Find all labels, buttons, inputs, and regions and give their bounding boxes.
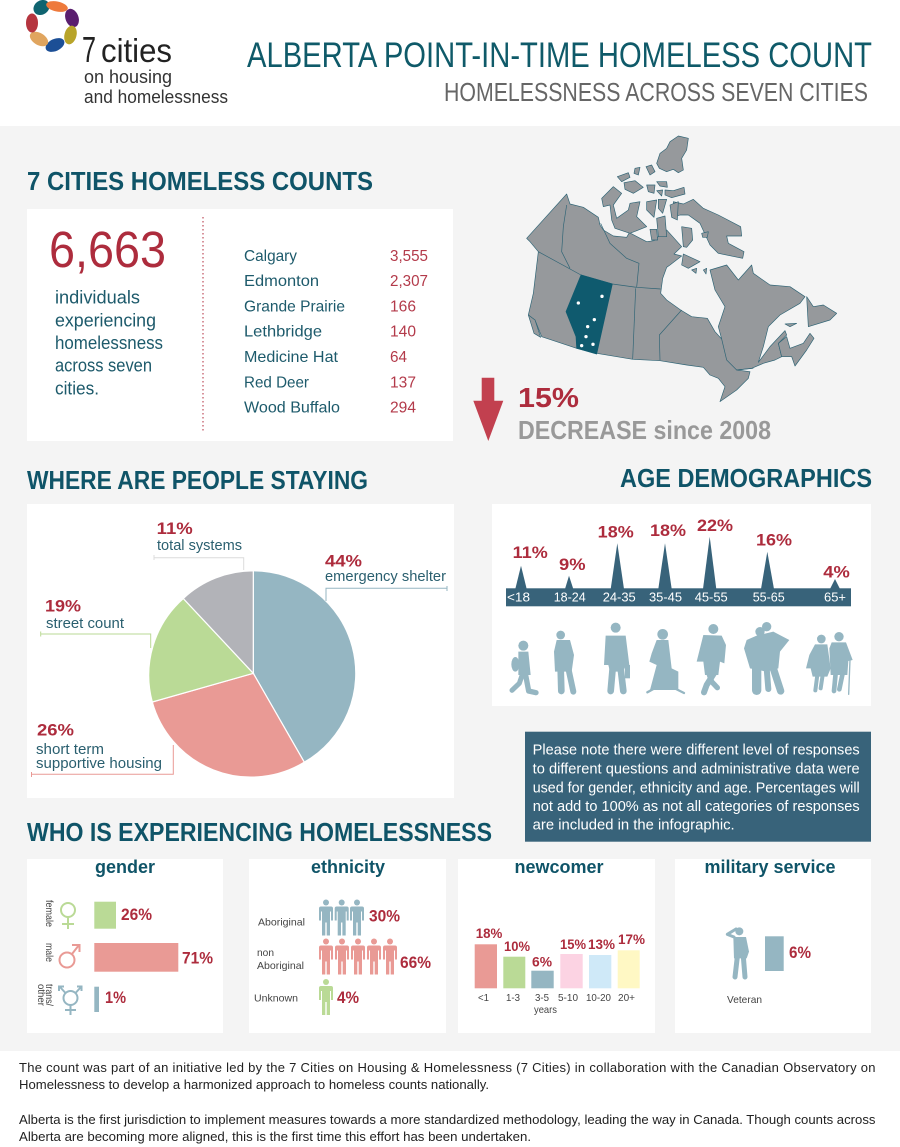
age axis with spikes: [506, 537, 851, 606]
age percentages: 18%: [598, 523, 634, 542]
city list: Edmonton: [244, 273, 319, 290]
figure: man with briefcase: [604, 623, 630, 691]
label: short term supportive housing: short term: [36, 741, 104, 758]
newcomer bar chart: <1: [478, 992, 489, 1004]
label: emergency shelter: 44%: [325, 552, 362, 571]
newcomer bar chart: 15%: [560, 936, 587, 952]
ethnicity row: Unknown: Unknown: [254, 993, 298, 1005]
people silhouettes by age: [511, 622, 853, 694]
newcomer bar chart: 17%: [618, 931, 646, 947]
city list: [244, 248, 428, 417]
panel: newcomer: newcomer: [514, 857, 604, 877]
ethnicity row: Unknown: [254, 979, 359, 1015]
newcomer bar chart: 13%: [588, 936, 616, 952]
gender row: trans/other: other: [35, 984, 47, 1006]
panel: where people stay: [27, 504, 454, 798]
newcomer bar chart: 3-5: [535, 992, 549, 1004]
age axis labels: 24-35: [603, 590, 636, 605]
label: short term supportive housing: 26%: [37, 721, 74, 740]
age axis labels: 45-55: [695, 590, 728, 605]
figure: couple: [744, 622, 789, 691]
panel: gender: gender: [95, 857, 155, 877]
label: street count: street count: [46, 615, 125, 632]
panel: newcomer: [458, 857, 655, 1033]
newcomer bar chart: [475, 925, 646, 1016]
age axis labels: <18: [507, 590, 530, 605]
footer text: Homelessness to develop a harmonized approach to homeless counts nationally.: [19, 1077, 489, 1092]
figure: child: [511, 641, 536, 693]
footer text: [0, 1051, 900, 1147]
panel: age demographics: [492, 504, 871, 706]
figure: woman in coat: [647, 629, 684, 693]
panel: ethnicity: [249, 857, 446, 1033]
ethnicity row: Unknown: 4%: [337, 988, 359, 1007]
label: total systems: total systems: [157, 537, 242, 554]
city list: Calgary: [244, 248, 297, 265]
age axis labels: 18-24: [554, 590, 586, 605]
ethnicity row: non Aboriginal: non: [257, 947, 274, 959]
total description: experiencing: [55, 310, 156, 330]
city list: Grande Prairie: [244, 298, 345, 315]
age percentages: 11%: [513, 543, 548, 562]
age percentages: [513, 516, 850, 582]
footer text: The count was part of an initiative led by the 7 Cities on Housing & Homelessness (7 Cities) in collaboration with the Canadian Observatory on: [19, 1060, 875, 1075]
figure: youth: [554, 631, 574, 692]
veteran label: Veteran: [727, 994, 762, 1006]
newcomer bar chart: 20+: [618, 992, 635, 1004]
newcomer bar chart: 1-3: [506, 992, 520, 1004]
decrease label: DECREASE since 2008: [518, 415, 771, 445]
gender row: male: 71%: [182, 949, 213, 968]
arrow: decrease: [473, 378, 503, 441]
label: emergency shelter: [325, 552, 447, 601]
map of Canada with Alberta highlighted: [527, 136, 837, 402]
label: short term supportive housing: [32, 721, 173, 777]
newcomer bar chart: 10%: [504, 938, 531, 954]
city list: 2,307: [390, 273, 428, 290]
callout: note: are included in the infographic.: [533, 817, 735, 833]
veteran percentage: 6%: [789, 943, 811, 962]
heading: age demographics: AGE DEMOGRAPHICS: [620, 463, 872, 493]
city list: 64: [390, 349, 407, 366]
newcomer bar chart: 6%: [532, 954, 553, 970]
heading: who is experiencing homelessness: WHO IS EXPERIENCING HOMELESSNESS: [27, 817, 492, 847]
age percentages: 18%: [650, 521, 686, 540]
label: street count: [41, 597, 151, 648]
gender row: female: [43, 900, 152, 929]
callout: note: used for gender, ethnicity and age. Percentages will: [533, 780, 860, 796]
gender row: trans/other: [35, 984, 126, 1015]
total description: across seven: [55, 356, 152, 376]
age axis labels: [507, 590, 846, 605]
label: street count: 19%: [45, 597, 81, 616]
age axis labels: 65+: [824, 590, 846, 605]
total description: cities.: [55, 378, 99, 398]
city list: 137: [390, 374, 416, 391]
city list: Medicine Hat: [244, 349, 339, 366]
logo: 7 cities: [26, 0, 228, 107]
gender row: trans/other: trans/: [43, 984, 55, 1006]
footer text: Alberta is the first jurisdiction to implement measures towards a more standardized methodology, leading the way in Canada. Though counts across: [19, 1112, 876, 1127]
decrease percentage: 15%: [518, 382, 579, 413]
ethnicity row: Aboriginal: Aboriginal: [258, 917, 305, 929]
newcomer bar chart: years: [534, 1004, 557, 1016]
logo: 7 cities: and homelessness: [84, 87, 228, 107]
logo: 7 cities: 7: [82, 29, 96, 70]
gender row: trans/other: 1%: [105, 988, 126, 1007]
city list: 166: [390, 298, 416, 315]
city list: 140: [390, 324, 416, 341]
total description: [55, 288, 163, 398]
icon: saluting soldier: [727, 927, 749, 977]
Alberta: [566, 275, 612, 354]
pie chart: [149, 571, 356, 777]
age axis labels: 55-65: [753, 590, 785, 605]
city list: 3,555: [390, 248, 428, 265]
label: total systems: 11%: [157, 519, 193, 538]
footer text: Alberta are becoming more aligned, this is the first time this effort has been undertaken.: [19, 1129, 531, 1144]
ethnicity row: non Aboriginal: Aboriginal: [257, 960, 304, 972]
callout: note: not add to 100% as not all categories of responses: [533, 799, 860, 815]
total count: 6,663: [49, 221, 166, 278]
newcomer bar chart: 18%: [476, 925, 503, 941]
age percentages: 22%: [697, 516, 733, 535]
gender row: male: [43, 943, 213, 972]
panel: military service: military service: [704, 857, 836, 877]
age percentages: 9%: [559, 555, 586, 574]
label: short term supportive housing: supportive housing: [36, 755, 162, 772]
city dots: [577, 295, 604, 347]
total description: homelessness: [55, 333, 163, 353]
callout: note: to different questions and administrative data were: [533, 761, 860, 777]
logo: 7 cities: on housing: [84, 67, 172, 87]
newcomer bar chart: 5-10: [558, 992, 578, 1004]
city list: Red Deer: [244, 374, 310, 391]
logo: 7 cities: cities: [101, 32, 172, 69]
figure: elderly pair: [806, 632, 853, 694]
ethnicity row: Aboriginal: [258, 900, 400, 936]
veteran bar: [765, 936, 784, 971]
callout: note: [525, 732, 871, 842]
city list: 294: [390, 400, 416, 417]
ethnicity row: non Aboriginal: [257, 938, 431, 974]
gender row: female: 26%: [121, 905, 152, 924]
figure: walking man: [697, 624, 726, 692]
callout: note: Please note there were different level of responses: [533, 742, 860, 758]
header band: [0, 0, 900, 126]
city list: Wood Buffalo: [244, 400, 340, 417]
ethnicity row: Aboriginal: 30%: [369, 907, 400, 926]
panel: gender: [27, 857, 223, 1033]
ethnicity row: non Aboriginal: 66%: [400, 953, 431, 972]
label: total systems: [154, 519, 244, 570]
label: emergency shelter: emergency shelter: [325, 568, 446, 585]
panel: military service: [675, 857, 871, 1033]
gender row: male: male: [43, 943, 55, 962]
total description: individuals: [55, 288, 140, 308]
city list: Lethbridge: [244, 324, 322, 341]
age axis labels: 35-45: [649, 590, 682, 605]
heading: 7 cities homeless counts: 7 CITIES HOMELESS COUNTS: [27, 166, 373, 196]
age percentages: 16%: [756, 531, 792, 550]
age percentages: 4%: [823, 563, 850, 582]
newcomer bar chart: 10-20: [586, 992, 611, 1004]
heading: where are people staying: WHERE ARE PEOPLE STAYING: [27, 465, 368, 495]
gender row: female: female: [43, 900, 55, 927]
panel: counts: [27, 209, 453, 441]
panel: ethnicity: ethnicity: [311, 857, 385, 877]
